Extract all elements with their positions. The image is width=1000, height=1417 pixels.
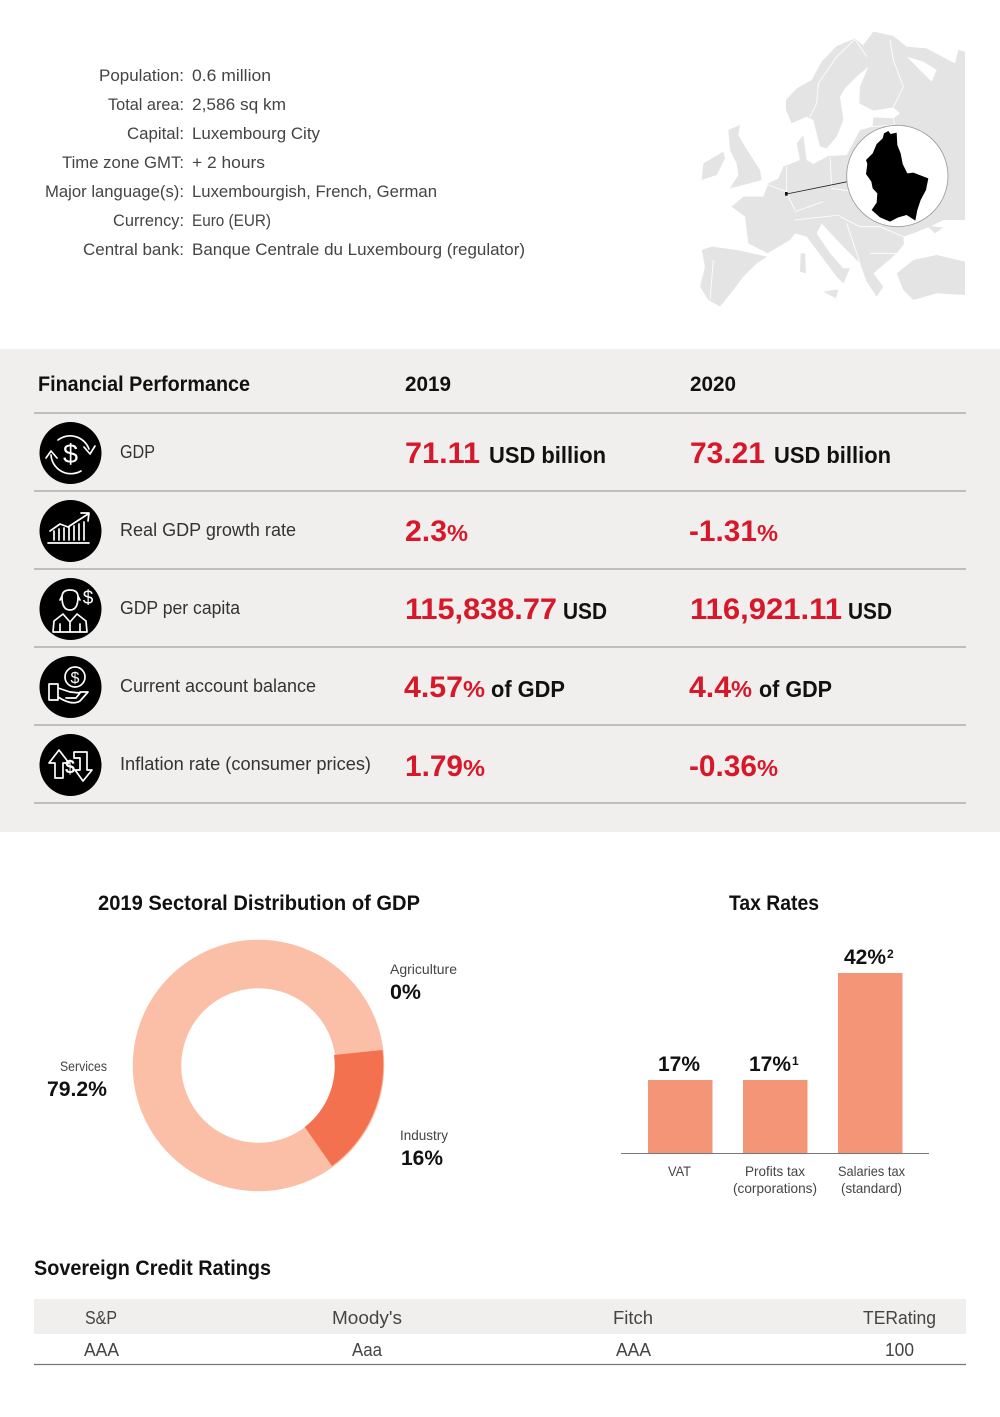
panel: country facts bbox=[45, 66, 525, 259]
panel: country facts: Euro (EUR) bbox=[192, 211, 271, 230]
heading: tax rates: Tax Rates bbox=[729, 892, 819, 915]
table: sovereign credit ratings: AAA bbox=[84, 1340, 119, 1360]
icon: GDP circular arrows: $ bbox=[63, 439, 78, 469]
panel: country facts: 0.6 million bbox=[192, 66, 271, 85]
table: sovereign credit ratings: TERating bbox=[863, 1308, 936, 1328]
label: services: 79.2% bbox=[47, 1078, 107, 1101]
label: industry: Industry bbox=[400, 1127, 448, 1143]
heading: sectoral distribution: 2019 Sectoral Distribution of GDP bbox=[98, 892, 420, 915]
row: Real GDP growth rate: 2.3 bbox=[405, 515, 447, 548]
label: agriculture: 0% bbox=[390, 981, 421, 1004]
bar chart: tax rates: 1 bbox=[792, 1054, 799, 1068]
panel: country facts: Currency: bbox=[113, 211, 184, 230]
bar chart: tax rates: 2 bbox=[887, 947, 894, 961]
row: GDP per capita bbox=[120, 593, 892, 626]
row: GDP per capita: USD bbox=[563, 598, 607, 624]
row: GDP: USD billion bbox=[489, 442, 606, 468]
panel: country facts: Capital: bbox=[127, 124, 184, 143]
label: industry bbox=[400, 1127, 448, 1170]
table header: 2019 bbox=[405, 373, 451, 396]
table: sovereign credit ratings: S&P bbox=[85, 1308, 117, 1328]
panel: country facts: + 2 hours bbox=[192, 153, 265, 172]
table: sovereign credit ratings bbox=[34, 1299, 966, 1364]
icon: hand holding coin: $ bbox=[71, 670, 80, 687]
icon: up and down arrows with dollar bbox=[40, 734, 102, 796]
bar chart: tax rates: (corporations) bbox=[733, 1180, 817, 1196]
row: Current account balance: Current account balance bbox=[120, 676, 316, 696]
panel: country facts: Population: bbox=[99, 66, 184, 85]
table: sovereign credit ratings: 100 bbox=[885, 1340, 914, 1360]
map: Europe with Luxembourg highlighted bbox=[700, 32, 965, 307]
row: GDP: 73.21 bbox=[690, 437, 765, 470]
panel: country facts: Banque Centrale du Luxembourg (regulator) bbox=[192, 240, 525, 259]
row: Real GDP growth rate: -1.31 bbox=[689, 515, 757, 548]
bar chart: tax rates: Salaries tax bbox=[838, 1163, 905, 1179]
row: GDP: 71.11 bbox=[405, 437, 480, 470]
table: sovereign credit ratings: AAA bbox=[616, 1340, 651, 1360]
row: GDP per capita: 116,921.11 bbox=[690, 593, 842, 626]
panel: country facts: 2,586 sq km bbox=[192, 95, 286, 114]
bar chart: tax rates: (standard) bbox=[841, 1180, 902, 1196]
row: Current account balance: of GDP bbox=[491, 676, 565, 702]
row: Inflation rate: % bbox=[757, 755, 778, 781]
leader line bbox=[787, 182, 847, 194]
row: GDP bbox=[120, 437, 891, 470]
row: Current account balance: % bbox=[731, 676, 752, 702]
table: sovereign credit ratings: Fitch bbox=[613, 1308, 653, 1328]
row: Inflation rate: % bbox=[463, 755, 485, 781]
icon: person with dollar bbox=[40, 578, 102, 640]
row: GDP: GDP bbox=[120, 442, 155, 462]
row: Current account balance bbox=[120, 671, 832, 704]
row: Current account balance: 4.4 bbox=[689, 671, 731, 704]
icon: GDP circular arrows bbox=[40, 422, 102, 484]
panel: country facts: Time zone GMT: bbox=[62, 153, 184, 172]
bar chart: tax rates: Profits tax bbox=[745, 1163, 805, 1179]
row: Real GDP growth rate bbox=[120, 515, 778, 548]
label: agriculture bbox=[390, 961, 457, 1004]
row: Current account balance: % bbox=[463, 676, 485, 702]
table: sovereign credit ratings: Aaa bbox=[352, 1340, 383, 1360]
panel: country facts: Luxembourg City bbox=[192, 124, 320, 143]
row: GDP: USD billion bbox=[774, 442, 891, 468]
row: Inflation rate: -0.36 bbox=[689, 750, 757, 783]
row: Inflation rate bbox=[120, 750, 778, 783]
icon: person with dollar: $ bbox=[83, 588, 94, 609]
row: Current account balance: of GDP bbox=[759, 676, 832, 702]
row: Current account balance: 4.57 bbox=[404, 671, 463, 704]
bar chart: tax rates: 17% bbox=[749, 1053, 791, 1076]
table: sovereign credit ratings: Moody's bbox=[332, 1308, 402, 1328]
bar chart: tax rates bbox=[621, 946, 929, 1196]
row: GDP per capita: USD bbox=[848, 598, 892, 624]
row: GDP per capita: 115,838.77 bbox=[405, 593, 557, 626]
panel: country facts: Luxembourgish, French, German bbox=[192, 182, 437, 201]
donut chart bbox=[157, 964, 383, 1167]
label: services: Services bbox=[60, 1058, 107, 1074]
row: Inflation rate: Inflation rate (consumer prices) bbox=[120, 754, 371, 774]
row: Real GDP growth rate: % bbox=[447, 520, 468, 546]
label: services bbox=[47, 1058, 107, 1101]
icon: growth chart bbox=[40, 500, 102, 562]
panel: country facts: Major language(s): bbox=[45, 182, 184, 201]
heading: sovereign credit ratings: Sovereign Credit Ratings bbox=[34, 1257, 271, 1280]
table header bbox=[38, 373, 736, 396]
table header: 2020 bbox=[690, 373, 736, 396]
icon: up and down arrows with dollar: $ bbox=[65, 757, 75, 777]
row: GDP per capita: GDP per capita bbox=[120, 598, 241, 618]
row: Inflation rate: 1.79 bbox=[405, 750, 463, 783]
inset circle bbox=[847, 125, 948, 227]
Luxembourg marker bbox=[785, 192, 788, 196]
table header: Financial Performance bbox=[38, 373, 250, 396]
panel: financial performance bbox=[0, 349, 1000, 832]
bar chart: tax rates: 42% bbox=[844, 946, 886, 969]
icon: hand holding coin bbox=[40, 656, 102, 718]
bar chart: tax rates: 17% bbox=[658, 1053, 700, 1076]
panel: country facts: Central bank: bbox=[83, 240, 184, 259]
Luxembourg silhouette bbox=[866, 131, 928, 222]
row: Real GDP growth rate: Real GDP growth rate bbox=[120, 520, 296, 540]
label: industry: 16% bbox=[401, 1147, 443, 1170]
row: Real GDP growth rate: % bbox=[757, 520, 778, 546]
bar chart: tax rates: VAT bbox=[668, 1163, 691, 1179]
label: agriculture: Agriculture bbox=[390, 961, 457, 977]
panel: country facts: Total area: bbox=[108, 95, 184, 114]
